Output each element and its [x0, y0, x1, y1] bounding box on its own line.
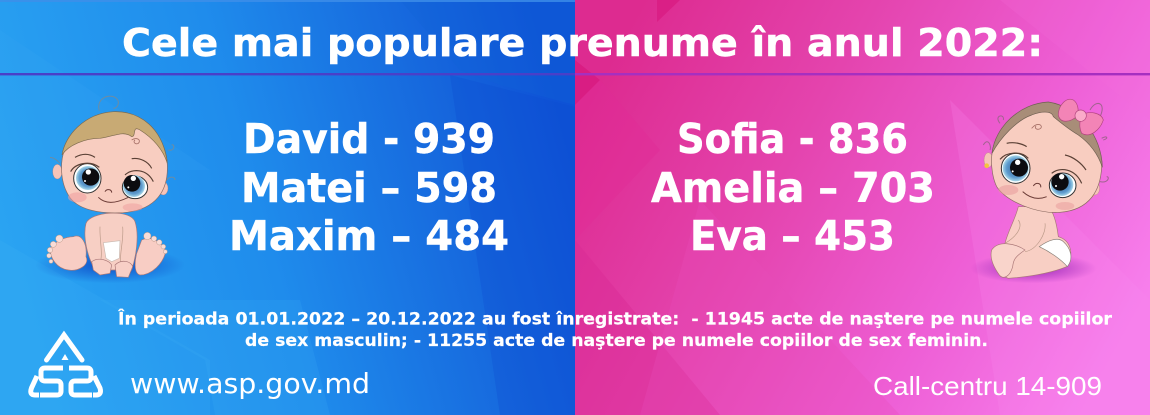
- icon: ASP logo: [31, 335, 100, 395]
- baby boy head: [62, 117, 167, 213]
- names: girls: [651, 115, 935, 260]
- baby girl legs and hands: [991, 244, 1025, 277]
- panel: blue background: [0, 0, 575, 415]
- baby boy left leg and foot: [50, 236, 87, 270]
- website link: www.asp.gov.md: [130, 367, 370, 400]
- divider line under the title: [0, 73, 1150, 75]
- baby girl nose and mouth: [1023, 183, 1047, 198]
- baby boy eyes: [71, 154, 153, 199]
- baby boy ears: [53, 164, 62, 179]
- baby boy hair curls: [50, 96, 175, 182]
- name: Matei: Matei – 598: [241, 164, 497, 212]
- baby boy hair: [62, 112, 167, 163]
- name: Amelia: Amelia – 703: [651, 164, 935, 212]
- text block: birth records: [118, 310, 1113, 350]
- names: boys: [229, 115, 509, 260]
- baby boy right leg and foot: [135, 238, 166, 275]
- baby boy arms: [100, 227, 123, 263]
- baby boy nose and mouth: [98, 190, 128, 202]
- baby girl head: [992, 107, 1102, 212]
- name: Maxim: Maxim – 484: [229, 212, 509, 260]
- baby boy toes: [47, 232, 167, 263]
- baby boy diaper: [103, 241, 120, 262]
- baby girl ears: [984, 153, 993, 167]
- text block: birth records: de sex masculin; - 11255 acte de naştere pe numele copiilor de sex feminin.: [245, 331, 988, 350]
- baby girl hair: [992, 102, 1102, 167]
- text block: birth records: În perioada 01.01.2022 – 20.12.2022 au fost înregistrate: - 11945 acte de naştere pe numele copiilor: [118, 310, 1113, 328]
- baby girl body: [999, 207, 1071, 278]
- panel: pink background: [575, 0, 1150, 415]
- baby girl arm: [1005, 220, 1045, 252]
- baby boy body: [85, 213, 137, 270]
- call centre number: Call-centru 14-909: [873, 371, 1102, 401]
- name: Sofia: Sofia - 836: [677, 115, 908, 163]
- baby girl diaper: [1039, 239, 1071, 267]
- name: Eva: Eva – 453: [690, 212, 895, 260]
- baby boy hands: [92, 259, 133, 277]
- name: David: David - 939: [243, 115, 495, 163]
- baby girl hair curls: [983, 103, 1108, 182]
- baby girl earrings: [984, 163, 1094, 197]
- title: Cele mai populare prenume în anul 2022:: [122, 21, 1043, 65]
- baby girl cheeks: [998, 185, 1018, 195]
- icon: baby girl: [970, 99, 1108, 283]
- baby girl eyes: [1000, 143, 1086, 198]
- baby boy cheeks: [68, 192, 87, 202]
- icon: baby boy: [35, 96, 185, 283]
- baby girl bow: [1058, 99, 1103, 135]
